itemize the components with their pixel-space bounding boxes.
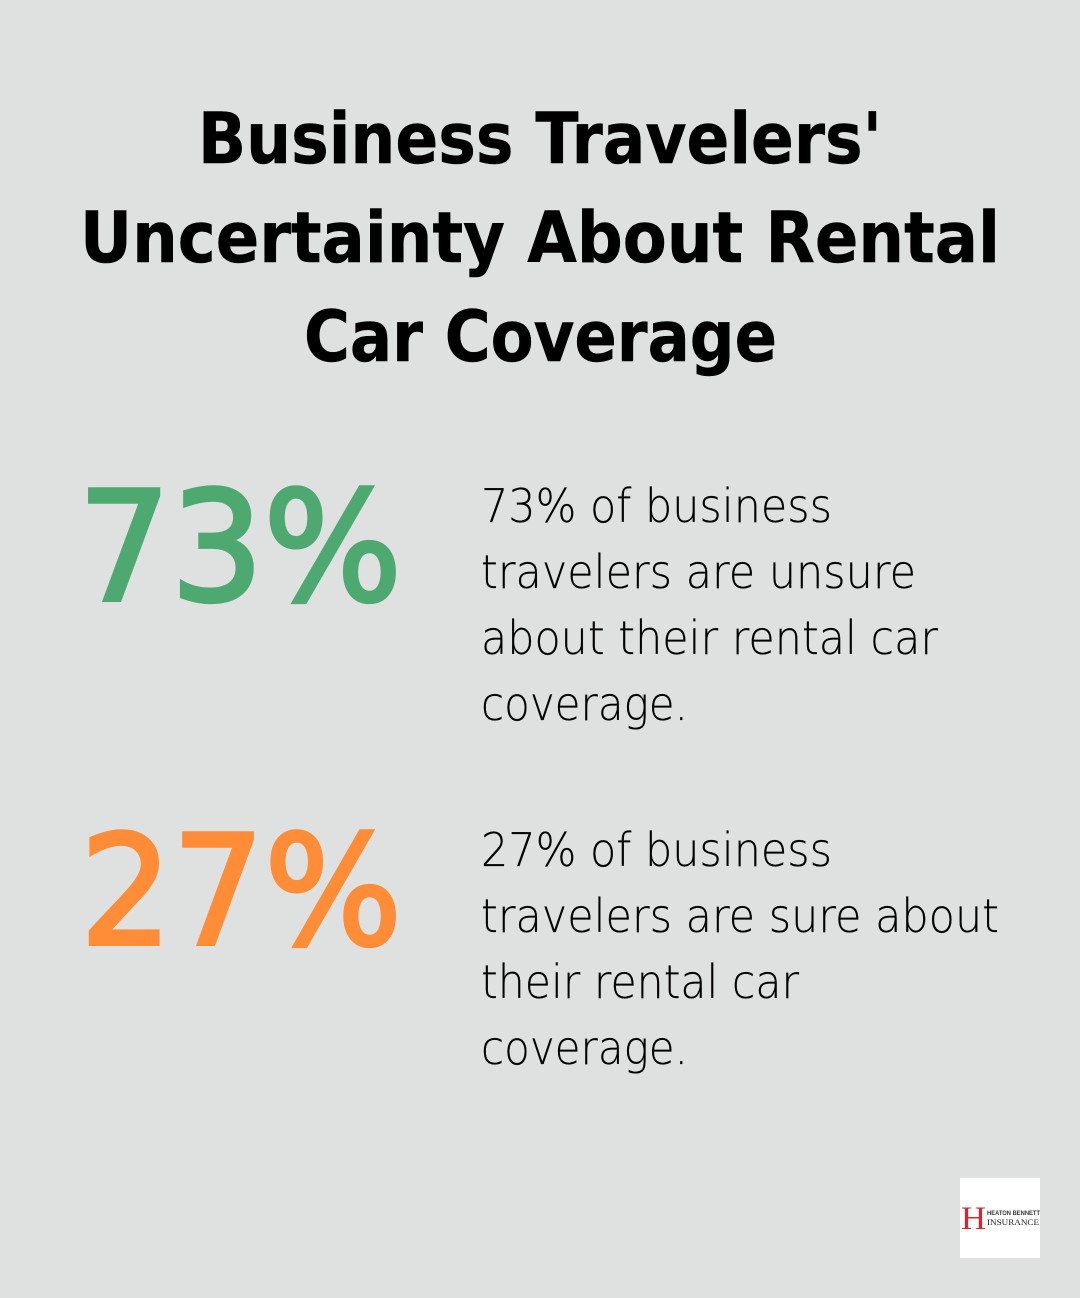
text: 27% description: 27% of business bbox=[481, 823, 832, 877]
text: 73% description: travelers are unsure bbox=[481, 545, 916, 599]
text: 73% description bbox=[481, 479, 938, 731]
title: Uncertainty About Rental bbox=[80, 197, 1000, 279]
logo: Heaton Bennett Insurance: H bbox=[961, 1201, 986, 1237]
text: 73% description: coverage. bbox=[481, 677, 688, 731]
stat: 73%: 73% bbox=[78, 459, 402, 636]
logo: Heaton Bennett Insurance: HEATON BENNETT bbox=[987, 1211, 1040, 1217]
title: Business Travelers' bbox=[198, 98, 882, 180]
text: 73% description: about their rental car bbox=[481, 611, 938, 665]
text: 27% description: their rental car bbox=[481, 955, 799, 1009]
text: 73% description: 73% of business bbox=[481, 479, 832, 533]
text: 27% description: travelers are sure about bbox=[481, 889, 999, 943]
title: Car Coverage bbox=[304, 296, 777, 378]
text: 27% description bbox=[481, 823, 999, 1075]
stat: 27%: 27% bbox=[80, 803, 402, 980]
title bbox=[80, 98, 1000, 378]
logo: Heaton Bennett Insurance: INSURANCE bbox=[987, 1218, 1039, 1227]
logo: Heaton Bennett Insurance bbox=[960, 1178, 1040, 1258]
text: 27% description: coverage. bbox=[481, 1021, 688, 1075]
